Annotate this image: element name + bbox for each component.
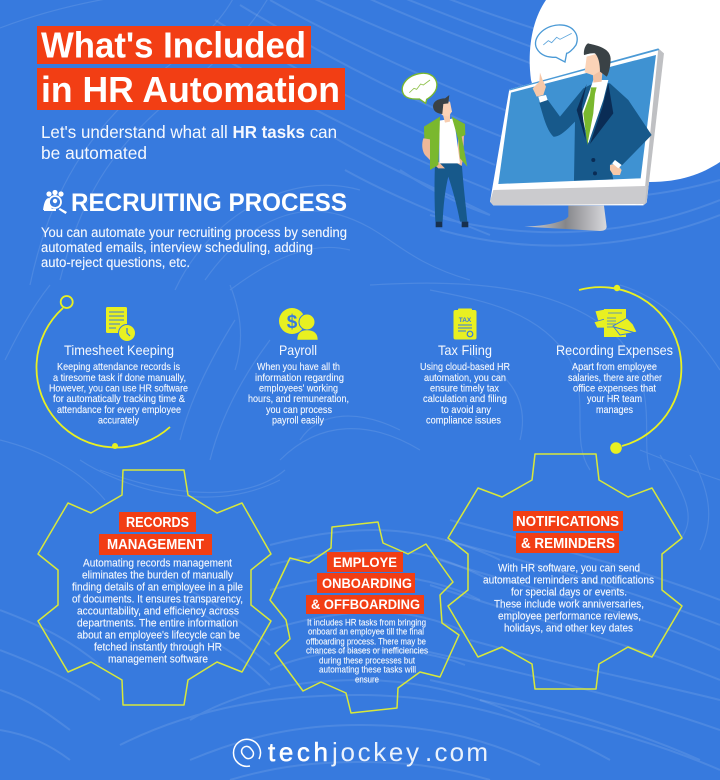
panel: tax filing: to avoid any xyxy=(441,404,492,416)
footer logo: techjockey.com xyxy=(233,737,488,767)
panel: tax filing: Tax Filing xyxy=(438,342,492,358)
heading: records management xyxy=(99,512,212,555)
panel: timesheet keeping: Timesheet Keeping xyxy=(64,342,174,358)
body text: notifications: These include work anniversaries, xyxy=(494,598,644,610)
panel: timesheet keeping: a tiresome task if done manually, xyxy=(53,372,186,384)
left yellow arc xyxy=(36,296,170,449)
gear outline: middle xyxy=(270,522,459,713)
panel: recording expenses: Recording Expenses xyxy=(556,342,673,358)
panel: recording expenses: office expenses that xyxy=(573,382,656,394)
panel: tax filing: compliance issues xyxy=(426,414,501,426)
panel: recording expenses: Apart from employee xyxy=(572,361,657,373)
heading: notifications xyxy=(513,511,623,553)
body text: employee onboarding: ensure xyxy=(355,674,379,685)
panel: payroll: hours, and remuneration, xyxy=(248,393,349,405)
panel: recording expenses xyxy=(556,309,673,416)
body text: records management: management software xyxy=(108,654,208,666)
body text: records management: accountability, and efficiency across xyxy=(77,606,239,618)
gear outline: left xyxy=(38,470,271,705)
panel: employee onboarding and offboarding xyxy=(270,522,459,713)
title: What's Included xyxy=(41,24,306,66)
panel: recording expenses: salaries, there are other xyxy=(568,372,662,384)
body text: records management: of documents. It ensures transparency, xyxy=(72,594,243,606)
panel: recording expenses: manages xyxy=(596,404,633,416)
body text: notifications: holidays, and other key dates xyxy=(504,622,633,634)
panel: tax filing: ensure timely tax xyxy=(430,382,500,394)
body text: records management: Automating records management xyxy=(83,558,232,570)
intro text: auto-reject questions, etc. xyxy=(41,255,190,270)
footer logo: techjockey.com: .com xyxy=(425,737,488,767)
heading: employee onboarding: ONBOARDING xyxy=(322,575,412,591)
gear outline: right xyxy=(448,454,682,689)
figure: boy xyxy=(422,95,468,227)
heading: notifications: NOTIFICATIONS xyxy=(516,514,619,530)
title: in HR Automation xyxy=(41,69,340,110)
body text: records management: finding details of an employee in a pile xyxy=(72,582,243,594)
panel: payroll: payroll easily xyxy=(272,414,325,426)
body text: notifications: employee performance reviews, xyxy=(498,610,641,622)
icon: recruiting people xyxy=(43,190,67,214)
icon: payroll: $ xyxy=(287,312,298,333)
intro text: automated emails, interview scheduling, adding xyxy=(41,240,313,255)
footer logo: techjockey.com: jockey xyxy=(331,737,419,767)
panel: timesheet keeping: Keeping attendance records is xyxy=(57,361,180,373)
heading: employee onboarding xyxy=(306,552,424,614)
illustration: monitor with businessman xyxy=(490,25,664,231)
panel: payroll: When you have all th xyxy=(257,361,340,373)
body text: records management: fetched instantly through HR xyxy=(94,642,222,654)
body text: employee onboarding: automating these tasks will xyxy=(319,665,416,676)
intro text xyxy=(41,225,347,270)
heading: records management: RECORDS xyxy=(126,515,189,531)
body text: employee onboarding: onboard an employee till the final xyxy=(308,627,424,638)
icon: at symbol xyxy=(233,739,260,766)
footer logo: techjockey.com: tech xyxy=(268,737,328,767)
body text: records management: eliminates the burden of manually xyxy=(82,570,233,582)
panel: timesheet keeping: accurately xyxy=(98,414,140,426)
panel: tax filing: calculation and filing xyxy=(423,393,507,405)
illustration: boy with speech bubble xyxy=(402,73,468,227)
panel: notifications and reminders xyxy=(448,454,682,689)
panel: records management xyxy=(38,470,271,705)
panel: recording expenses: your HR team xyxy=(587,393,642,405)
panel: payroll: employees' working xyxy=(259,382,338,394)
panel: payroll: Payroll xyxy=(279,342,317,358)
body text: notifications: automated reminders and notifications xyxy=(483,574,654,586)
body text: employee onboarding: during these processes but xyxy=(319,655,415,666)
body text: records management: about an employee's lifecycle can be xyxy=(77,630,240,642)
heading: records management: MANAGEMENT xyxy=(107,537,204,553)
panel: payroll: information regarding xyxy=(255,372,344,384)
body text: employee onboarding xyxy=(306,618,428,685)
body text: notifications: With HR software, you can send xyxy=(498,563,640,575)
title xyxy=(37,24,345,110)
icon: timesheet xyxy=(106,307,136,342)
speech bubble: small xyxy=(402,73,437,103)
panel: tax filing: automation, you can xyxy=(424,372,506,384)
body text: employee onboarding: It includes HR tasks from bringing xyxy=(307,618,426,629)
heading: recruiting process: RECRUITING PROCESS xyxy=(71,189,347,217)
panel: tax filing: Using cloud-based HR xyxy=(420,361,510,373)
body text: notifications xyxy=(483,563,654,634)
subtitle xyxy=(41,122,337,163)
body text: records management: departments. The entire information xyxy=(77,618,238,630)
speech bubble: large xyxy=(535,25,577,62)
body text: notifications: for special days or events. xyxy=(511,586,627,598)
heading: employee onboarding: EMPLOYE xyxy=(333,554,397,570)
body text: employee onboarding: chances of biases or inefficiencies xyxy=(306,646,428,657)
panel: payroll xyxy=(248,308,349,426)
body text: records management xyxy=(72,558,243,666)
icon: tax document: TAX xyxy=(459,317,472,324)
subtitle: be automated xyxy=(41,143,147,163)
body text: employee onboarding: offboarding process. There may be xyxy=(306,636,426,647)
white background blob xyxy=(530,0,720,182)
panel: timesheet keeping xyxy=(49,307,188,426)
icon: expenses xyxy=(594,309,637,337)
monitor xyxy=(490,48,664,205)
panel: timesheet keeping: However, you can use HR software xyxy=(49,382,188,394)
panel: payroll: you can process xyxy=(266,404,332,416)
figure: businessman xyxy=(533,43,652,181)
right yellow arc xyxy=(579,285,681,454)
heading: notifications: & REMINDERS xyxy=(521,536,615,552)
panel: timesheet keeping: for automatically tracking time & xyxy=(53,393,185,405)
subtitle: Let's understand what all HR tasks can xyxy=(41,122,337,142)
monitor stand xyxy=(524,206,607,231)
panel: timesheet keeping: attendance for every employee xyxy=(57,404,181,416)
heading: employee onboarding: & OFFBOARDING xyxy=(311,596,420,612)
panel: tax filing xyxy=(420,308,510,426)
intro text: You can automate your recruiting process by sending xyxy=(41,225,347,240)
